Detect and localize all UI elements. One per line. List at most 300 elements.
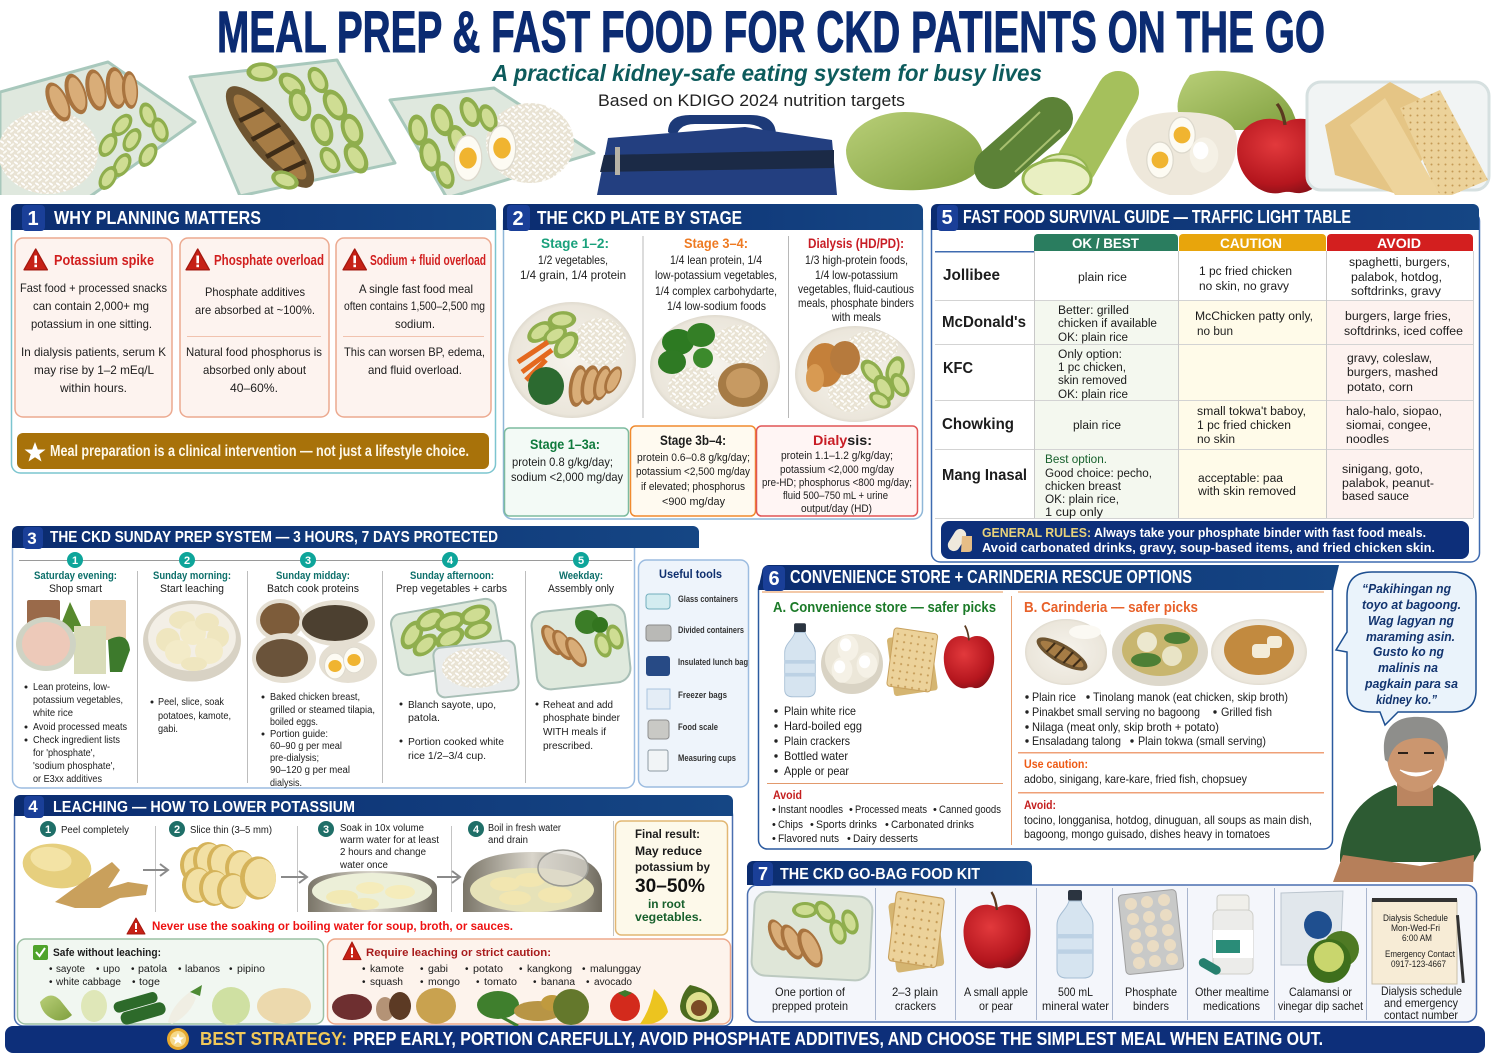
item: dialysis schedule notepad: Dialysis Schedule [1383,913,1448,923]
safe without leaching list: pipino [237,964,265,975]
section B: carinderia: adobo, sinigang, kare-kare, fried fish, chopsuey [1024,772,1247,786]
section A: convenience store: Sports drinks [816,819,877,831]
item: calamansi and vinegar sachet [1278,891,1364,1013]
step 1: shop smart: white rice [32,708,73,719]
item: water bottle: 500 mL [1058,985,1093,999]
heading: THE CKD GO-BAG FOOD KIT [780,866,980,883]
card: potassium spike [15,238,172,417]
step 2: start leaching: Peel, slice, soak [158,697,225,708]
safe without leaching list: patola [138,964,167,975]
traffic light table: sinigang, goto, [1342,464,1423,476]
section A: convenience store: Carbonated drinks [891,819,974,831]
step 3: batch cook proteins: pre-dialysis; [270,753,319,764]
step 1: shop smart [16,552,130,785]
require leaching list: • [465,964,469,975]
section A: convenience store: • [772,819,776,831]
traffic light table: siomai, congee, [1346,420,1431,432]
step 1: shop smart: 'sodium phosphate', [33,761,115,772]
step 3: batch cook proteins: 60–90 g per meal [270,741,342,752]
callout: general rules: Avoid carbonated drinks, gravy, soup-based items, and fried chicken skin. [982,540,1435,555]
traffic light table: palabok, peanut- [1342,478,1434,490]
heading: WHY PLANNING MATTERS [54,208,261,228]
speech bubble: Wag lagyan ng [1368,613,1454,628]
safe without leaching list: • [229,964,233,975]
target box: dialysis [756,426,918,516]
require leaching list: gabi [428,964,448,975]
step 4: boil: Boil in fresh water [488,823,562,834]
panel: useful tools: Glass containers [678,594,738,604]
item: water bottle: mineral water [1042,999,1109,1013]
safe without leaching list: • [131,964,135,975]
target box: stage 3b-4: <900 mg/day [662,496,725,508]
traffic light table: Good choice: pecho, [1045,468,1152,480]
require leaching list: • [519,964,523,975]
card: sodium and fluid overload: Sodium + fluid overload [370,252,486,269]
require leaching list: mongo [428,977,460,988]
step 1: shop smart: potassium vegetables, [33,695,123,706]
callout: general rules: GENERAL RULES: Always take your phosphate binder with fast food meals. [982,525,1426,540]
step 1: shop smart: for 'phosphate', [33,748,95,759]
section A: convenience store [767,599,1003,845]
require leaching list: squash [370,977,403,988]
step 3: batch cook proteins: 90–120 g per meal [270,765,350,776]
traffic light table: plain rice [1073,420,1121,432]
card: phosphate overload: Phosphate additives [205,285,305,299]
card: potassium spike: can contain 2,000+ mg [33,299,149,313]
traffic light table: acceptable: paa [1198,473,1284,485]
step 3: soak: warm water for at least [339,835,439,846]
traffic light table: chicken breast [1045,481,1122,493]
section A: convenience store: Hard-boiled egg [784,719,862,733]
final result box: vegetables. [635,910,702,924]
patient portrait [1333,717,1481,882]
panel: useful tools: Useful tools [659,567,722,581]
card: phosphate overload: absorbed only about [203,363,307,377]
step 4: prep vegetables and carbs: patola. [408,713,440,724]
safe without leaching list: • [178,964,182,975]
callout: general rules [941,521,1469,559]
card: phosphate overload: Phosphate overload [214,252,324,269]
step 3: batch cook proteins: Portion guide: [270,729,328,740]
step 3: soak: water once [339,860,388,871]
evidence basis note: Based on KDIGO 2024 nutrition targets [598,91,905,110]
step 3: batch cook proteins [252,552,377,789]
step 2: start leaching: gabi. [158,724,178,735]
stage 3-4 plate [650,235,780,419]
final result box: Final result: [635,827,700,841]
item: phosphate binders: Phosphate [1125,985,1177,999]
step 5: assembly only: prescribed. [543,741,593,752]
panel 7: the CKD go-bag food kit [747,861,1476,1022]
traffic light table: Jollibee [943,267,1000,284]
dialysis plate: with meals [831,310,881,324]
require leaching list: kangkong [527,964,572,975]
panel 4: leaching: 4 [28,797,38,816]
step 1: shop smart: Shop smart [49,583,102,595]
step 2: slice: Slice thin (3–5 mm) [190,825,272,836]
card: sodium and fluid overload: This can worsen BP, edema, [344,345,485,359]
card: sodium and fluid overload: A single fast food meal [359,282,473,296]
card: sodium and fluid overload: sodium. [395,317,435,331]
card: sodium and fluid overload: and fluid overload. [368,363,462,377]
item: phosphate binders [1118,889,1184,1013]
item: other medications: Other mealtime [1195,985,1269,999]
step 1: shop smart: Lean proteins, low- [33,682,110,693]
safe without leaching list: Safe without leaching: [53,947,161,959]
require leaching list: • [533,977,537,988]
item: dialysis schedule notepad: Mon-Wed-Fri [1391,923,1440,933]
require leaching list: tomato [484,977,517,988]
traffic light table: with skin removed [1197,486,1296,498]
safe without leaching list: toge [139,977,160,988]
stage 1-2 plate: 1/4 grain, 1/4 protein [520,268,626,282]
arrow [143,864,168,876]
item: dialysis schedule notepad: 0917-123-4667 [1391,959,1446,969]
item: phosphate binders: binders [1133,999,1169,1013]
step 1: shop smart: Saturday evening: [34,570,117,582]
step 2: start leaching: Start leaching [160,583,224,595]
section A: convenience store: • [933,804,937,816]
step 5: assembly only: phosphate binder [543,713,621,724]
card: sodium and fluid overload [336,238,491,417]
subtitle: A practical kidney-safe eating system for busy lives [491,60,1042,86]
panel 7: the CKD go-bag food kit: 7 [758,864,768,884]
traffic light table: potato, corn [1347,382,1413,394]
section A: convenience store: Plain white rice [784,704,856,718]
section A: convenience store: • [885,819,889,831]
target box: dialysis: pre-HD; phosphorus <800 mg/day; [762,477,912,489]
traffic light table: spaghetti, burgers, [1349,257,1450,269]
section A: convenience store: Flavored nuts [778,833,839,845]
step 2: start leaching: Sunday morning: [153,570,231,582]
icon: medal [167,1028,189,1050]
section B: carinderia: Plain tokwa (small serving) [1138,734,1266,748]
card: phosphate overload: are absorbed at ~100%. [195,303,315,317]
section B: carinderia: Grilled fish [1221,705,1272,719]
target box: dialysis: protein 1.1–1.2 g/kg/day; [781,450,893,462]
step 4: boil [463,821,602,912]
panel 6: convenience store and carinderia [758,565,1339,849]
step 1: shop smart: 1 [72,555,78,567]
dialysis plate: 1/3 high-protein foods, [805,253,908,267]
target box: dialysis: fluid 500–750 mL + urine [783,490,888,502]
dialysis plate [795,235,915,422]
card: potassium spike: may rise by 1–2 mEq/L [34,363,154,377]
card: phosphate overload: 40–60%. [230,381,278,395]
require leaching list: • [420,964,424,975]
safe without leaching list: sayote [56,964,85,975]
traffic light table: 1 cup only [1045,507,1103,519]
step 3: batch cook proteins: Baked chicken breast, [270,692,360,703]
speech bubble: Gusto ko ng [1373,644,1444,659]
panel: useful tools [638,560,748,787]
dialysis plate: meals, phosphate binders [798,296,914,310]
step 3: batch cook proteins: dialysis. [270,778,302,789]
traffic light table: gravy, coleslaw, [1347,353,1432,365]
safe without leaching list [18,939,324,1026]
item: calamansi and vinegar sachet: Calamansi or [1289,985,1352,999]
heading: FAST FOOD SURVIVAL GUIDE — TRAFFIC LIGHT TABLE [963,207,1351,227]
section B: carinderia: Plain rice [1032,690,1076,704]
section A: convenience store: • [772,833,776,845]
item: dialysis schedule notepad [1372,898,1465,1022]
bottom banner: best strategy: PREP EARLY, PORTION CAREFULLY, AVOID PHOSPHATE ADDITIVES, AND CHOOSE THE SIMPLEST MEAL WHEN EATING OUT. [353,1029,1323,1049]
panel: useful tools: Divided containers [678,625,744,635]
final result box: potassium by [635,860,710,874]
require leaching list: potato [473,964,503,975]
traffic light table: Only option: [1058,349,1122,361]
final result box: 30–50% [635,876,705,897]
step 4: prep vegetables and carbs: Prep vegetables + carbs [396,583,507,595]
speech bubble: malinis na [1378,660,1438,675]
require leaching list: malunggay [590,964,641,975]
section B: carinderia: Ensaladang talong [1032,734,1121,748]
traffic light table: AVOID [1377,235,1421,251]
stage 3-4 plate: low-potassium vegetables, [655,268,777,282]
section A: convenience store: Dairy desserts [853,833,918,845]
step 4: prep vegetables and carbs: Blanch sayote, upo, [408,700,496,711]
traffic light table: halo-halo, siopao, [1346,406,1442,418]
step 1: peel [20,821,148,908]
step 4: boil: and drain [488,835,528,846]
panel: useful tools: Insulated lunch bag [678,657,748,667]
section A: convenience store: Processed meats [855,804,927,816]
require leaching list: • [586,977,590,988]
bottom banner: best strategy: BEST STRATEGY: [200,1029,347,1049]
bottom banner: best strategy [5,1026,1485,1053]
card: potassium spike: Potassium spike [54,252,154,269]
dialysis plate: Dialysis (HD/PD): [808,235,904,251]
step 2: start leaching [143,552,241,735]
speech bubble: maraming asin. [1366,629,1455,644]
item: apple [963,892,1031,1013]
step 3: batch cook proteins: boiled eggs. [270,717,318,728]
card: phosphate overload [180,238,329,417]
target box: dialysis: potassium <2,000 mg/day [780,464,894,476]
traffic light table: OK: plain rice [1058,332,1128,344]
traffic light table: based sauce [1342,491,1409,503]
warning message: Never use the soaking or boiling water for soup, broth, or sauces. [152,919,513,933]
target box: dialysis: Dialysis: [813,432,872,448]
step 2: start leaching: potatoes, kamote, [158,711,231,722]
item: prepped protein: prepped protein [772,999,848,1013]
require leaching list: banana [541,977,575,988]
step 5: assembly only: Assembly only [548,583,614,595]
section B: carinderia [1018,599,1324,841]
section A: convenience store: A. Convenience store — safer picks [773,599,996,616]
traffic light table: Best option. [1045,454,1107,466]
card: sodium and fluid overload: often contains 1,500–2,500 mg [344,299,485,313]
traffic light table: no skin [1197,434,1235,446]
panel 4: leaching [14,795,733,1026]
item: dialysis schedule notepad: Dialysis schedule [1381,984,1462,998]
step 2: slice [169,821,276,909]
card: potassium spike: Fast food + processed snacks [20,281,167,295]
section B: carinderia: Use caution: [1024,757,1088,771]
step 1: shop smart: Check ingredient lists [33,735,120,746]
step 2: start leaching: 2 [184,555,190,567]
section B: carinderia: Nilaga (meat only, skip broth + potato) [1032,720,1219,734]
panel 3: the CKD Sunday prep system [12,526,748,789]
section B: carinderia: Pinakbet small serving no bagoong [1032,705,1200,719]
traffic light table: chicken if available [1058,318,1157,330]
require leaching list [328,939,730,1026]
safe without leaching list: • [49,964,53,975]
section B: carinderia: B. Carinderia — safer picks [1024,599,1198,616]
panel 5: fast food traffic light table [931,204,1480,562]
section A: convenience store: Avoid [773,788,802,802]
item: other medications: medications [1203,999,1260,1013]
traffic light table: OK: plain rice, [1045,494,1119,506]
section A: convenience store: Chips [778,819,803,831]
panel 6: convenience store and carinderia: 6 [768,568,780,590]
item: dialysis schedule notepad: Emergency Contact [1385,949,1455,959]
section A: convenience store: Apple or pear [784,764,849,778]
arrow [281,871,307,883]
require leaching list: avocado [594,977,632,988]
panel 2: the CKD plate by stage: 2 [512,208,524,230]
step 5: assembly only [530,552,632,752]
traffic light table: 1 pc fried chicken [1197,420,1291,432]
traffic light table: skin removed [1058,375,1127,387]
step 5: assembly only: 5 [578,555,584,567]
panel 1: why planning matters: 1 [27,208,39,230]
final result box [616,821,728,935]
target box: stage 3b-4: protein 0.6–0.8 g/kg/day; [637,452,750,464]
heading: CONVENIENCE STORE + CARINDERIA RESCUE OPTIONS [790,567,1192,587]
item: apple: or pear [979,999,1013,1013]
step 4: prep vegetables and carbs: Portion cooked white [408,737,504,748]
heading: THE CKD PLATE BY STAGE [537,208,742,228]
card: potassium spike: within hours. [59,381,127,395]
section B: carinderia: Avoid: [1024,798,1056,812]
item: other medications [1195,895,1269,1013]
section A: convenience store: • [772,804,776,816]
target box: stage 3b-4: Stage 3b–4: [660,432,726,448]
traffic light table: KFC [943,360,973,377]
speech bubble: toyo at bagoong. [1362,597,1461,612]
speech bubble: “Pakihingan ng [1362,581,1451,596]
traffic light table: palabok, hotdog, [1351,272,1442,284]
traffic light table: softdrinks, gravy [1351,286,1441,298]
step 4: prep vegetables and carbs [389,552,519,762]
card: potassium spike: potassium in one sitting. [31,317,152,331]
stage 1-2 plate [508,235,636,418]
step 3: soak: 3 [323,824,329,836]
card: phosphate overload: Natural food phosphorus is [186,345,322,359]
step 3: batch cook proteins: 3 [305,555,311,567]
item: dialysis schedule notepad: 6:00 AM [1402,933,1432,943]
speech bubble [1336,572,1476,725]
step 4: boil: 4 [473,824,480,836]
section A: convenience store: Canned goods [939,804,1001,816]
panel 1: why planning matters [11,204,496,473]
step 3: soak: Soak in 10x volume [340,823,424,834]
traffic light table: 1 pc fried chicken [1199,266,1292,278]
traffic light table: plain rice [1078,272,1127,284]
heading: THE CKD SUNDAY PREP SYSTEM — 3 HOURS, 7 DAYS PROTECTED [50,529,498,546]
step 1: shop smart: or E3xx additives [33,774,102,785]
section B: carinderia: Tinolang manok (eat chicken, skip broth) [1093,690,1288,704]
require leaching list: • [420,977,424,988]
traffic light table: McChicken patty only, [1195,311,1313,323]
safe without leaching list: • [49,977,53,988]
stage 3-4 plate: 1/4 lean protein, 1/4 [670,253,762,267]
target box: dialysis: output/day (HD) [801,503,872,515]
target box: stage 1-3a: sodium <2,000 mg/day [511,470,623,484]
traffic light table: burgers, large fries, [1345,311,1451,323]
section B: carinderia: bagoong, mongo guisado, dishes heavy in tomatoes [1024,827,1270,841]
traffic light table: 1 pc chicken, [1058,362,1126,374]
item: water bottle [1042,890,1109,1013]
target box: stage 3b-4: potassium <2,500 mg/day [636,466,750,478]
step 3: batch cook proteins: grilled or steamed tilapia, [270,705,375,716]
require leaching list: Require leaching or strict caution: [366,947,551,959]
step 4: prep vegetables and carbs: rice 1/2–3/4 cup. [408,751,486,762]
panel 2: the CKD plate by stage [503,204,923,519]
traffic light table: Chowking [942,416,1014,433]
safe without leaching list: white cabbage [55,977,121,988]
section A: convenience store: Instant noodles [778,804,843,816]
traffic light table: Mang Inasal [942,467,1027,484]
traffic light table [935,234,1474,519]
item: crackers: 2–3 plain [892,985,938,999]
traffic light table: OK: plain rice [1058,389,1128,401]
item: crackers [888,891,945,1013]
require leaching list: • [362,977,366,988]
traffic light table: burgers, mashed [1347,367,1438,379]
section A: convenience store: • [847,833,851,845]
card: potassium spike: In dialysis patients, serum K [21,345,166,359]
target box: stage 1-3a: protein 0.8 g/kg/day; [512,455,613,469]
item: prepped protein: One portion of [775,985,846,999]
step 3: soak [308,821,439,912]
step 4: prep vegetables and carbs: 4 [447,555,454,567]
dialysis plate: vegetables, fluid-cautious [798,282,914,296]
target box: stage 3b-4: if elevated; phosphorus [641,481,745,493]
item: prepped protein [751,891,873,1013]
section A: convenience store: Bottled water [784,749,848,763]
step 4: prep vegetables and carbs: Sunday afternoon: [410,570,494,582]
dialysis plate: 1/4 low-potassium [815,268,898,282]
target box: stage 1-3a: Stage 1–3a: [530,436,600,452]
traffic light table: noodles [1346,434,1389,446]
step 5: assembly only: Reheat and add [543,700,613,711]
panel 3: the CKD Sunday prep system: 3 [27,529,37,548]
stage 3-4 plate: 1/4 low-sodium foods [667,299,766,313]
speech bubble: pagkain para sa [1364,676,1458,691]
stage 1-2 plate: 1/2 vegetables, [538,253,608,267]
section B: carinderia: tocino, longganisa, hotdog, dinuguan, all soups as main dish, [1024,813,1312,827]
step 1: peel: Peel completely [61,825,129,836]
item: dialysis schedule notepad: and emergency [1384,996,1458,1010]
target box: stage 3b-4 [630,426,756,516]
traffic light table: small tokwa't baboy, [1197,406,1306,418]
callout: clinical intervention [17,433,489,469]
final result box: in root [648,897,685,911]
step 2: slice: 2 [174,824,180,836]
traffic light table: OK / BEST [1072,235,1139,251]
step 1: peel: 1 [45,824,51,836]
safe without leaching list: • [96,964,100,975]
require leaching list: • [362,964,366,975]
panel: useful tools: Measuring cups [678,753,736,763]
item: crackers: crackers [895,999,936,1013]
require leaching list: kamote [370,964,404,975]
panel 5: fast food traffic light table: 5 [941,207,953,229]
safe without leaching list: labanos [185,964,220,975]
heading: LEACHING — HOW TO LOWER POTASSIUM [53,799,355,816]
